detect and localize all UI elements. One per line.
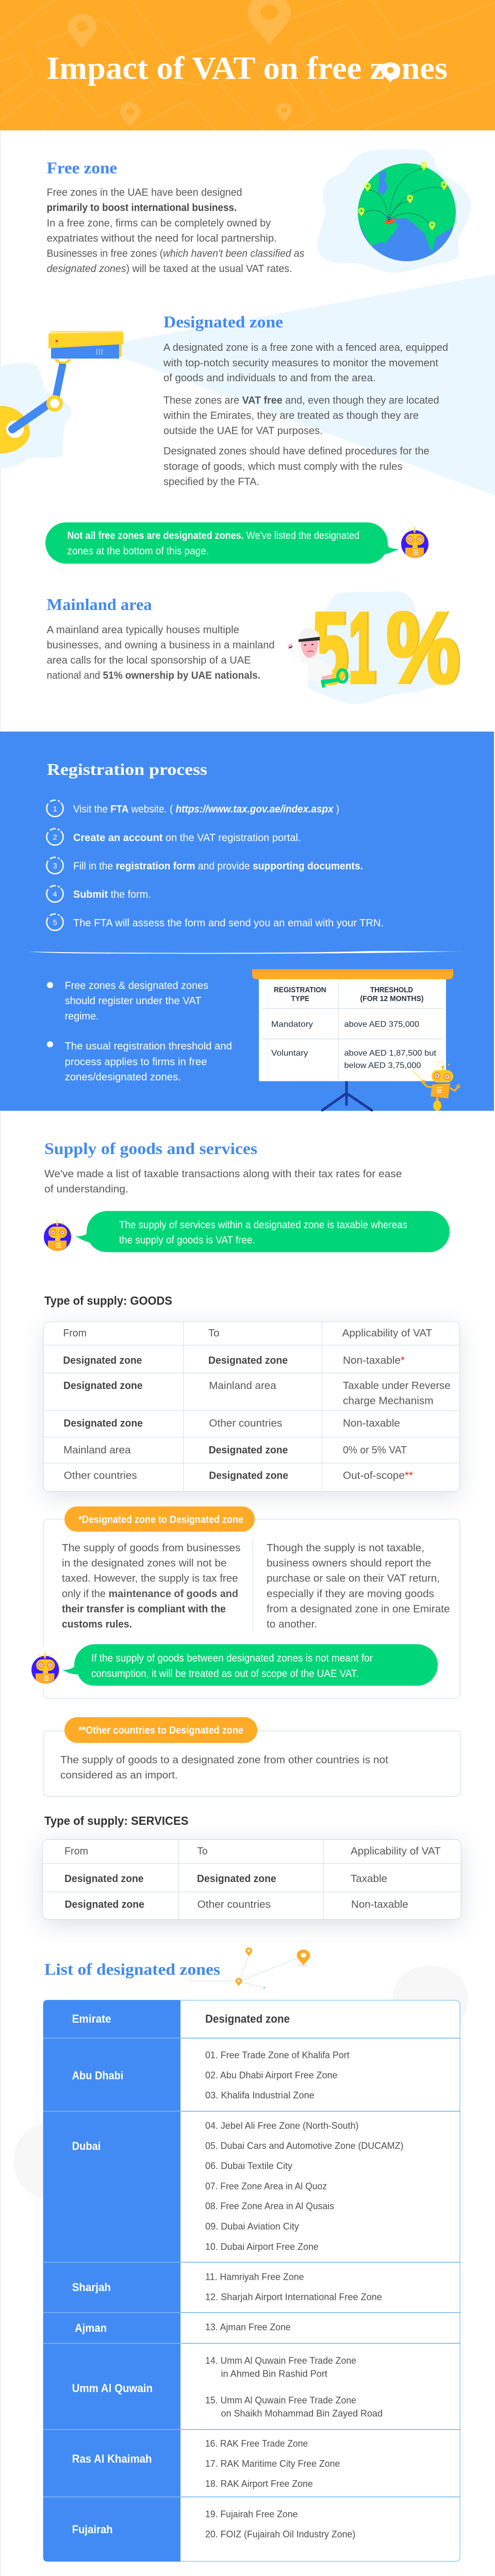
row: Dubai: Dubai [72,2140,101,2153]
bullet list: should register under the VAT [65,995,201,1007]
table: goods: Designated zone [209,1470,288,1482]
bullet list: zones/designated zones. [65,1072,181,1083]
icon: man with key [288,629,347,688]
chart: threshold board: TYPE [291,994,309,1003]
text: free zone body: Businesses in free zones (which haven't been classified as [47,248,304,260]
heading: mainland area: Mainland area [47,595,152,614]
chart: threshold board: above AED 375,000 [344,1020,419,1029]
text: designated zone body: storage of goods, which must comply with the rules [163,461,403,472]
panel: designated to designated note [31,1506,460,1699]
icon: robot mascot [401,527,428,558]
table: goods: 0% or 5% VAT [343,1445,407,1456]
bullet list: Free zones & designated zones [65,980,208,992]
step 1: 1 [53,805,57,814]
chart: threshold board [252,969,453,1110]
text: left column: their transfer is compliant with the [62,1603,226,1615]
text: right column: especially if they are moving goods [267,1588,434,1600]
bullet list: process applies to firms in free [65,1056,207,1067]
table: goods [43,1322,460,1497]
text: other countries body: The supply of goods to a designated zone from other countries is not [60,1755,388,1766]
table: services: Designated zone [64,1873,143,1885]
text: designated zone body: specified by the FTA. [163,476,259,487]
callout: services vs goods: The supply of services within a designated zone is taxable whereas [119,1219,407,1231]
row: Ras Al Khaimah: Ras Al Khaimah [72,2452,152,2465]
panel: other countries note [44,1717,460,1797]
chart: 51 percent graphic: 1 [348,591,375,704]
row: Dubai: 08. Free Zone Area in Al Qusais [205,2201,334,2211]
callout: out of scope: If the supply of goods between designated zones is not meant for [91,1653,373,1664]
table: goods: Designated zone [63,1418,143,1429]
chart: threshold board: Mandatory [271,1020,313,1029]
heading: registration process: Registration process [47,760,207,778]
step 3: 3 [53,861,57,871]
chart: 51 percent graphic: 5 [311,591,348,705]
table: services: Designated zone [197,1873,276,1885]
step 2 [46,828,301,845]
text: designated zone body: with top-notch security measures to monitor the movement [163,358,438,369]
row: Ajman [75,2321,291,2334]
row: Umm Al Quwain: Umm Al Quwain [72,2382,153,2395]
column header [72,2012,290,2025]
heading: type of supply services: Type of supply: SERVICES [44,1814,189,1827]
icon: robot mascot [31,1652,59,1684]
text: left column: The supply of goods from businesses [62,1543,240,1554]
header banner [0,0,495,130]
text: designated zone body: These zones are VAT free and, even though they are located [163,395,439,406]
bullet list: regime. [65,1011,99,1022]
row: Ajman: 13. Ajman Free Zone [205,2322,291,2332]
text: right column [267,1543,450,1630]
callout: services vs goods [75,1211,450,1252]
callout: out of scope: consumption, it will be treated as out of scope of the UAE VAT. [91,1668,359,1680]
chart: threshold board: (FOR 12 MONTHS) [360,994,424,1003]
row: Ras Al Khaimah: 17. RAK Maritime City Free Zone [205,2459,340,2469]
icon: robot mascot [44,1219,71,1251]
text: left column [62,1543,240,1630]
column header: Emirate [72,2012,111,2025]
text: right column: purchase or sale on their VAT return, [267,1573,440,1584]
heading: type of supply goods: Type of supply: GOODS [44,1294,172,1308]
callout: out of scope [62,1644,438,1686]
step 5: 5 [53,918,57,927]
chart: 51 percent graphic: 1 [350,591,377,704]
column header: Designated zone [205,2012,290,2025]
heading: designated zone: Designated zone [163,313,283,331]
table: goods: From [63,1328,87,1339]
step 1: Visit the FTA website. ( https://www.tax.gov.ae/index.aspx ) [73,804,339,815]
step 3: Fill in the registration form and provide supporting documents. [73,860,363,872]
icon: pointing robot [412,1061,460,1111]
table: designated zones [43,2000,460,2562]
bullet list [47,980,232,1083]
row: Ras Al Khaimah: 18. RAK Airport Free Zone [205,2479,313,2489]
text: free zone body [47,187,304,275]
table: services: Designated zone [65,1899,144,1910]
row: Dubai: 06. Dubai Textile City [205,2161,292,2171]
table: goods: Mainland area [63,1445,131,1456]
callout: not all free zones [45,522,399,564]
row: Fujairah: 19. Fujairah Free Zone [205,2509,298,2519]
step 2: Create an account on the VAT registration portal. [73,833,301,844]
table: services: Non-taxable [351,1899,408,1910]
step 5 [46,914,384,930]
table: goods: Other countries [209,1418,282,1429]
table: services: Applicability of VAT [351,1846,441,1857]
text: other countries body: considered as an import. [60,1770,178,1781]
panel: supply of goods and services [43,1139,460,1497]
table: services: Taxable [351,1873,387,1885]
row: Sharjah [72,2272,382,2302]
text: free zone body: designated zones) will be taxed at the usual VAT rates. [47,263,292,275]
text: designated zone body [163,342,448,487]
text: free zone body: primarily to boost international business. [47,202,237,214]
step 5: The FTA will assess the form and send you an email with your TRN. [73,918,384,929]
pill: designated to designated: *Designated zone to Designated zone [78,1514,243,1526]
text: supply intro [44,1168,402,1195]
callout: not all free zones: zones at the bottom of this page. [67,546,209,557]
chart: 51 percent graphic [308,591,461,705]
row: Ras Al Khaimah: 16. RAK Free Trade Zone [205,2438,308,2449]
text: left column: only if the maintenance of goods and [62,1588,238,1600]
row: Fujairah: 20. FOIZ (Fujairah Oil Industry Zone) [205,2529,355,2539]
text: mainland area body: national and 51% ownership by UAE nationals. [47,670,260,682]
row: Abu Dhabi [72,2050,350,2100]
text: mainland area body [47,624,275,682]
text: right column: Though the supply is not taxable, [267,1543,424,1554]
bullet list: The usual registration threshold and [65,1041,232,1052]
text: supply intro: We've made a list of taxable transactions along with their tax rates for ease [44,1168,402,1180]
row: Fujairah [72,2509,355,2539]
table: services: From [64,1846,88,1857]
text: left column: in the designated zones will not be [62,1558,227,1569]
table: goods: Non-taxable [343,1418,400,1429]
row: Umm Al Quwain: 14. Umm Al Quwain Free Trade Zone [205,2355,356,2366]
step 4: Submit the form. [73,889,151,901]
row: Dubai: 10. Dubai Airport Free Zone [205,2242,319,2252]
table: goods: Applicability of VAT [342,1328,432,1339]
step 4 [46,886,151,902]
row: Sharjah: 12. Sharjah Airport International Free Zone [205,2292,382,2302]
chart: threshold board: above AED 1,87,500 but [344,1049,437,1058]
row: Abu Dhabi: 02. Abu Dhabi Airport Free Zone [205,2070,337,2080]
text: free zone body: expatriates without the need for local partnership. [47,233,277,244]
table: goods: Mainland area [209,1380,277,1392]
text: left column: customs rules. [62,1619,132,1630]
text: free zone body: In a free zone, firms can be completely owned by [47,217,271,229]
text: designated zone body: outside the UAE for VAT purposes. [163,426,323,437]
heading: supply of goods and services: Supply of goods and services [44,1139,257,1158]
row: Abu Dhabi: 03. Khalifa Industrial Zone [205,2090,315,2100]
table: goods: Other countries [64,1470,137,1482]
text: right column: from a designated zone in one Emirate [267,1603,450,1615]
text: left column: taxed. However, the supply is tax free [62,1573,238,1584]
chart: 51 percent graphic: 5 [313,591,350,705]
text: designated zone body: Designated zones should have defined procedures for the [163,446,430,457]
row: Ajman: Ajman [75,2321,107,2334]
row: Abu Dhabi: 01. Free Trade Zone of Khalifa Port [205,2050,350,2060]
table: services [43,1839,461,1925]
text: mainland area body: businesses, and owning a business in a mainland [47,640,275,651]
icon: location pins [191,1947,310,1989]
table: goods: Non-taxable* [343,1355,405,1366]
row: Fujairah: Fujairah [72,2523,113,2536]
row: Umm Al Quwain: on Shaikh Mohammad Bin Zayed Road [221,2408,383,2418]
icon: security camera [0,331,123,468]
table: goods: Designated zone [209,1445,288,1456]
row: Umm Al Quwain: 15. Umm Al Quwain Free Trade Zone [205,2395,356,2405]
pill: other countries [64,1717,257,1743]
text: supply intro: of understanding. [44,1184,128,1195]
icon: globe with pins [317,149,471,273]
row: Dubai: 04. Jebel Ali Free Zone (North-South) [205,2121,359,2131]
row: Dubai: 09. Dubai Aviation City [205,2222,299,2232]
row: Abu Dhabi: Abu Dhabi [72,2069,123,2082]
callout: services vs goods: the supply of goods is VAT free. [119,1234,255,1246]
table: goods: Designated zone [63,1355,142,1366]
text: right column: to another. [267,1619,317,1630]
text: mainland area body: area calls for the local sponsorship of a UAE [47,655,251,666]
text: designated zone body: of goods and individuals to and from the area. [163,372,375,384]
heading: list of designated zones: List of designated zones [44,1960,220,1978]
row: Sharjah: 11. Hamriyah Free Zone [205,2272,304,2282]
text: other countries body [60,1755,388,1781]
heading: free zone: Free zone [47,159,117,177]
step 4: 4 [53,890,57,899]
row: Dubai [72,2121,403,2252]
text: designated zone body: within the Emirates, they are treated as though they are [163,410,419,421]
chart: threshold board: REGISTRATION [274,986,326,994]
chart: 51 percent graphic: % [388,591,461,704]
panel: mainland area [47,595,275,682]
text: designated zone body: A designated zone is a free zone with a fenced area, equipped [163,342,448,353]
chart: 51 percent graphic: % [386,591,459,704]
table: goods: Out-of-scope** [343,1470,413,1482]
table: goods: Designated zone [208,1355,288,1366]
page edge [0,130,1,2576]
chart: threshold board: Voluntary [271,1049,308,1058]
row: Umm Al Quwain: in Ahmed Bin Rashid Port [221,2369,327,2379]
table: services: To [197,1846,208,1857]
chart: threshold board: below AED 3,75,000 [344,1061,421,1070]
panel: free zone [47,149,471,275]
panel: registration process [0,732,494,1111]
text: mainland area body: A mainland area typically houses multiple [47,624,239,636]
background: camera beam [119,274,495,496]
pill: other countries: **Other countries to Designated zone [78,1725,243,1736]
row: Ras Al Khaimah [72,2438,340,2489]
background: faint pins [13,1965,468,2199]
row: Dubai: 05. Dubai Cars and Automotive Zone (DUCAMZ) [205,2141,403,2151]
pill: designated to designated [64,1506,255,1532]
title: Impact of VAT on free zones [46,51,448,86]
panel: designated zone [163,313,448,487]
row: Umm Al Quwain [72,2355,383,2418]
table: goods: Designated zone [63,1380,142,1392]
table: goods: To [208,1328,220,1339]
step 1 [46,800,339,817]
row: Dubai: 07. Free Zone Area in Al Quoz [205,2181,327,2191]
text: free zone body: Free zones in the UAE have been designed [47,187,242,198]
step 2: 2 [53,833,57,842]
text: right column: business owners should report the [267,1558,431,1569]
step 3 [46,857,363,874]
row: Sharjah: Sharjah [72,2281,111,2294]
table: goods: charge Mechanism [343,1396,434,1407]
chart: threshold board: THRESHOLD [370,986,413,994]
table: services: Other countries [197,1899,271,1910]
table: goods: Taxable under Reverse [343,1380,451,1392]
callout: not all free zones: Not all free zones are designated zones. We've listed the designated [67,530,359,541]
